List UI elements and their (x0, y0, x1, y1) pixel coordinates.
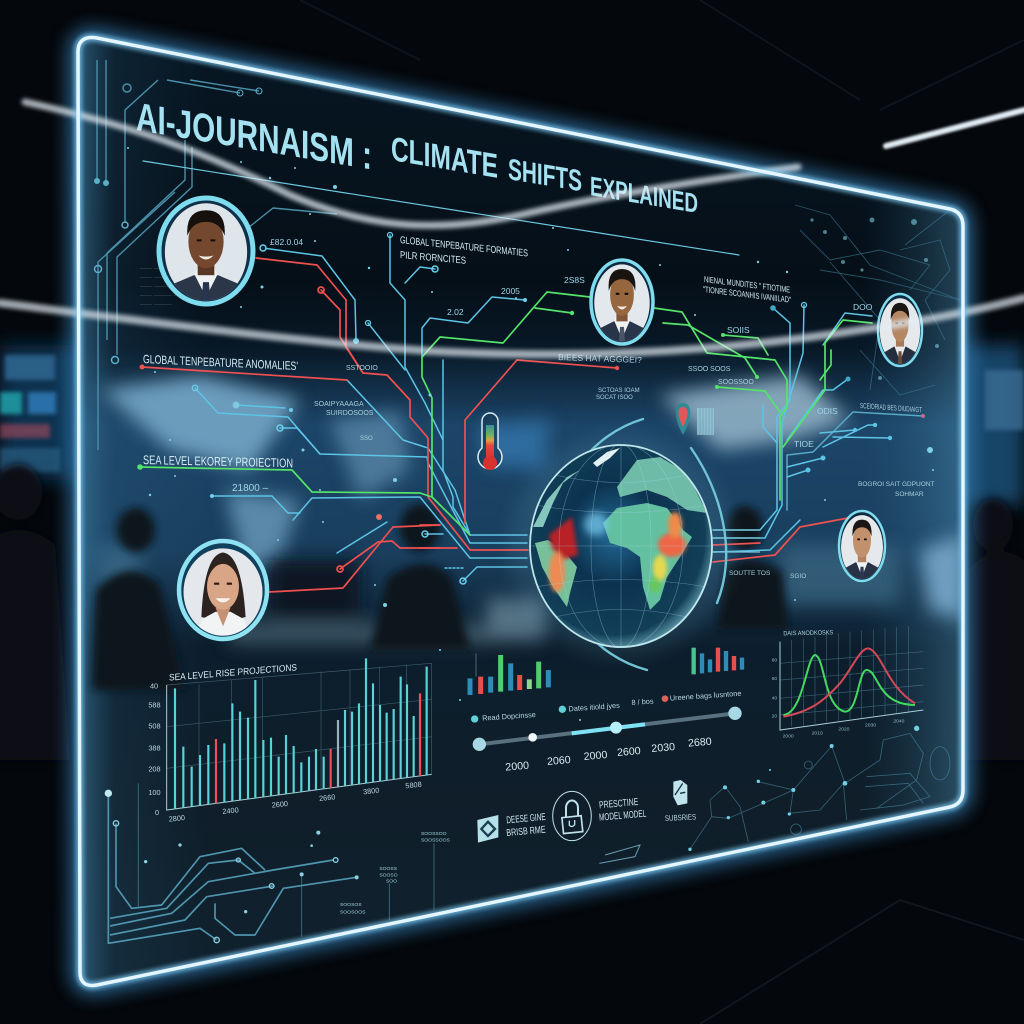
icon: lock (553, 791, 591, 841)
circuits: lower left: SOOSSOO (421, 831, 447, 837)
chart axis labels: 0 (155, 808, 159, 817)
text block: left data list: —— ——— —— — (140, 293, 193, 299)
chart axis labels (772, 658, 905, 739)
legend: Read Dopcinsse (482, 710, 536, 723)
small link (599, 845, 640, 863)
icon: thermometer (478, 413, 502, 470)
data values: 2S8S (564, 275, 585, 285)
label: national mundites: NIENAL MUNDITES " FTIOTIME (704, 274, 790, 295)
icon: shield box (477, 815, 498, 843)
grid (529, 444, 713, 648)
small captions: SOAIPYAAAGA (314, 401, 364, 408)
data values: TIOE (794, 439, 814, 449)
small captions: SSTOOIO (346, 365, 378, 372)
avatar: man right (878, 294, 922, 366)
chart axis labels (148, 681, 422, 824)
chart axis labels: 5808 (405, 780, 422, 790)
text: disease engine: BRISB RME (506, 825, 546, 839)
avatar: man lower right (839, 511, 885, 581)
chart series (783, 655, 915, 715)
title: EXPLAINED (590, 170, 698, 219)
light streaks crossing the screen (0, 102, 1024, 354)
title (136, 104, 698, 212)
text block: left data list: —— ——— —— (140, 284, 185, 290)
small captions: SSO (360, 436, 373, 442)
avatar: man top left (159, 198, 253, 304)
circuit lines: red (140, 258, 848, 592)
globe (509, 434, 733, 658)
mini bars, timeline and icons (470, 648, 742, 863)
data values: £82.0.04 (270, 237, 303, 247)
text: predictive model: MODEL MODEL (599, 809, 647, 824)
timeline: 2000 (505, 760, 530, 774)
panel labels (143, 235, 934, 580)
decorative circuits: upper left (94, 60, 739, 450)
small captions: BIEES HAT AGGGEI? (558, 352, 642, 365)
data values: DOO (853, 302, 873, 312)
text: disease engine (506, 812, 546, 839)
legend: 8 / bos (631, 696, 654, 707)
timeline (473, 707, 742, 774)
data values: ODIS (817, 406, 838, 416)
data values: SOIIS (727, 325, 750, 335)
chart title: DAIS ANODKOSKS (783, 629, 833, 637)
chart axis labels: 588 (148, 700, 161, 709)
heat map hot spots (549, 512, 686, 593)
text: predictive model: PRESCTINE (599, 797, 639, 811)
circuits: lower left: SOOSS (379, 866, 398, 872)
chart: line chart lower right (772, 626, 923, 739)
mini bar chart left (470, 653, 548, 695)
chart axis labels: 2040 (893, 719, 905, 725)
chart axis labels: 2400 (222, 805, 239, 816)
circuit lines: cyan (192, 232, 925, 584)
label: tionre scoanhis: "TIONRE SCOANHIS IVANIILAD" (703, 284, 791, 305)
chart axis labels: 508 (148, 721, 161, 730)
data values: 2.02 (447, 307, 464, 317)
chart axis labels: 208 (148, 765, 161, 774)
text block: left data list: —— ——— —— (140, 275, 185, 281)
legend: Ureene bags lusntone (670, 689, 742, 703)
chart axis labels: 20 (772, 713, 777, 719)
small captions: SGIO (790, 573, 806, 580)
decorative network: lower right (688, 726, 950, 851)
circuits: lower left: SOOSOS (340, 902, 362, 908)
title: SHIFTS (508, 153, 582, 198)
globe connector bundle: right (713, 530, 760, 552)
scattered data points (127, 147, 934, 771)
text: sources: SUBSRIES (665, 812, 696, 823)
backdrop: blurred world map and office (92, 375, 965, 690)
chart axis labels: 2600 (271, 799, 288, 810)
chart grid (167, 663, 432, 805)
chart: sea level rise projections (148, 658, 432, 824)
label: global temperature anomalies: GLOBAL TENPEBATURE ANOMALIES' (143, 352, 298, 373)
chart axis labels: 2660 (319, 792, 336, 803)
circuits: lower left: SOOSO (379, 873, 398, 879)
chart axis labels: 100 (148, 788, 161, 797)
chart axis labels: 2000 (783, 733, 794, 739)
chart axis labels: 388 (148, 744, 161, 753)
icon: document (673, 780, 687, 805)
circuit lines: green (137, 292, 872, 535)
mini bar chart right (694, 648, 742, 674)
text block: left data list (140, 268, 176, 304)
chart axis labels: 2030 (865, 723, 876, 729)
timeline: 2600 (617, 745, 641, 759)
chart axis labels: 80 (772, 658, 777, 664)
title: AI-JOURNAISM : (136, 94, 372, 178)
circuits: lower left: SOOSSOOS (421, 838, 450, 844)
continents (533, 448, 707, 610)
text block: left data list: —— ——— —— (140, 266, 185, 272)
circuits: lower left: SOO (386, 879, 397, 885)
avatar: woman (179, 541, 267, 639)
small captions: SUIRDOSOOS (326, 410, 374, 417)
label: global temperature formaties: GLOBAL TENPEBATURE FORMATIES (400, 235, 528, 259)
data values (232, 237, 873, 494)
small captions: SOHMAR (895, 491, 924, 498)
chart axis labels: 2010 (812, 730, 823, 736)
timeline: 2030 (651, 741, 676, 755)
chart axis labels: 2020 (838, 727, 850, 733)
data values: 2005 (501, 286, 520, 296)
legend: Dates itiold jyes (568, 701, 620, 713)
data values: 21800 – (232, 483, 269, 494)
avatar: man center (591, 260, 653, 344)
circuits: lower left (105, 783, 450, 943)
small captions: SOCAT ISOO (596, 395, 633, 401)
small captions: BOGROI SAIT GDPUONT (858, 481, 934, 488)
text: disease engine: DEESE GINE (506, 812, 546, 826)
small captions: SSOO SOOS (688, 366, 731, 373)
title: CLIMATE (391, 130, 498, 186)
chart axis labels: 2800 (168, 813, 185, 824)
icon: location pin (676, 403, 690, 435)
label: sea level projection: SEA LEVEL EKOREY PROIECTION (143, 453, 293, 470)
small captions: SOUTTE TOS (729, 570, 771, 577)
icon: data document (697, 408, 714, 435)
small captions: SCTOAS IOAM (598, 388, 640, 394)
timeline: 2680 (688, 736, 712, 750)
label: pilr rorncites: PILR RORNCITES (400, 250, 466, 267)
chart frame and grid (780, 626, 923, 727)
legend (471, 689, 742, 723)
chart axis labels: 60 (772, 676, 777, 682)
chart axis labels: 40 (772, 695, 777, 701)
small captions (314, 352, 934, 580)
chart bars (175, 658, 427, 809)
text: predictive model (599, 797, 647, 824)
circuits: lower left: SOOSOOS (340, 909, 366, 915)
chart axis labels: 3800 (363, 786, 380, 796)
timeline: 2000 (583, 749, 608, 763)
small captions: SOOSSOO (718, 379, 754, 386)
text block: left data list: —— ——— (140, 302, 172, 308)
chart axis labels: 40 (150, 681, 158, 690)
small captions: SCEIORIAD BES DIUDIAIGT (860, 401, 922, 414)
chart title: SEA LEVEL RISE PROJECTIONS (169, 662, 297, 683)
timeline: 2060 (547, 754, 571, 768)
globe rings (590, 418, 728, 672)
decorative network: upper right (795, 205, 960, 395)
